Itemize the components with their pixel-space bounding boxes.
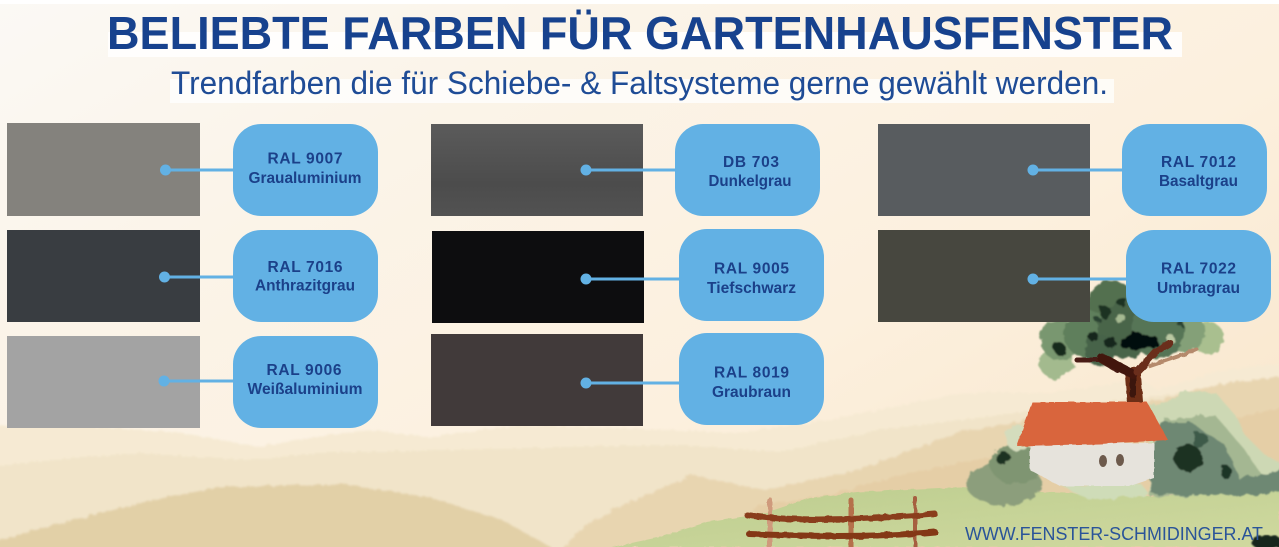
illustration: fence [747, 498, 935, 547]
title: BELIEBTE FARBEN FÜR GARTENHAUSFENSTER [107, 7, 1173, 59]
house roof [1017, 402, 1168, 446]
color: RAL 7016 [7, 230, 378, 322]
color: RAL 9006: Weißaluminium [248, 381, 362, 398]
color: RAL 7012: Basaltgrau [1159, 173, 1238, 190]
color: DB 703: Dunkelgrau [708, 173, 792, 190]
color: RAL 9007: RAL 9007 [268, 150, 342, 168]
title highlight [108, 32, 1182, 57]
subtitle: Trendfarben die für Schiebe- & Faltsysteme gerne gewählt werden. [171, 65, 1108, 101]
color: RAL 9007 [7, 123, 378, 216]
color: RAL 7016: RAL 7016 [268, 259, 343, 276]
color: RAL 7022 [878, 230, 1271, 322]
subtitle highlight [170, 79, 1114, 103]
house wall [1030, 443, 1154, 486]
color: DB 703 [431, 124, 820, 216]
website url: WWW.FENSTER-SCHMIDINGER.AT [965, 524, 1263, 544]
color: RAL 9006: RAL 9006 [266, 362, 342, 379]
hill: green meadow [612, 487, 1279, 547]
house window right [1116, 454, 1124, 466]
color: RAL 9006 [7, 336, 378, 428]
illustration: bushes [966, 392, 1279, 505]
color: RAL 8019: Graubraun [712, 384, 791, 401]
color: DB 703: DB 703 [723, 154, 779, 171]
corner shrub [1252, 536, 1279, 547]
house window left [1099, 455, 1107, 467]
color: RAL 7022: Umbragrau [1157, 280, 1240, 297]
color: RAL 9007: Graualuminium [248, 170, 362, 187]
color: RAL 7012: RAL 7012 [1161, 154, 1236, 171]
color: RAL 7016: Anthrazitgrau [255, 278, 355, 294]
color: RAL 9005: RAL 9005 [714, 260, 789, 278]
color: RAL 7012 [878, 124, 1267, 216]
color: RAL 9005 [432, 229, 824, 323]
color: RAL 7022: RAL 7022 [1161, 260, 1236, 278]
color: RAL 8019: RAL 8019 [714, 364, 789, 382]
color: RAL 9005: Tiefschwarz [707, 280, 796, 297]
illustration: tree [1039, 281, 1224, 402]
color: RAL 8019 [431, 333, 824, 426]
illustration: house [1017, 402, 1168, 486]
